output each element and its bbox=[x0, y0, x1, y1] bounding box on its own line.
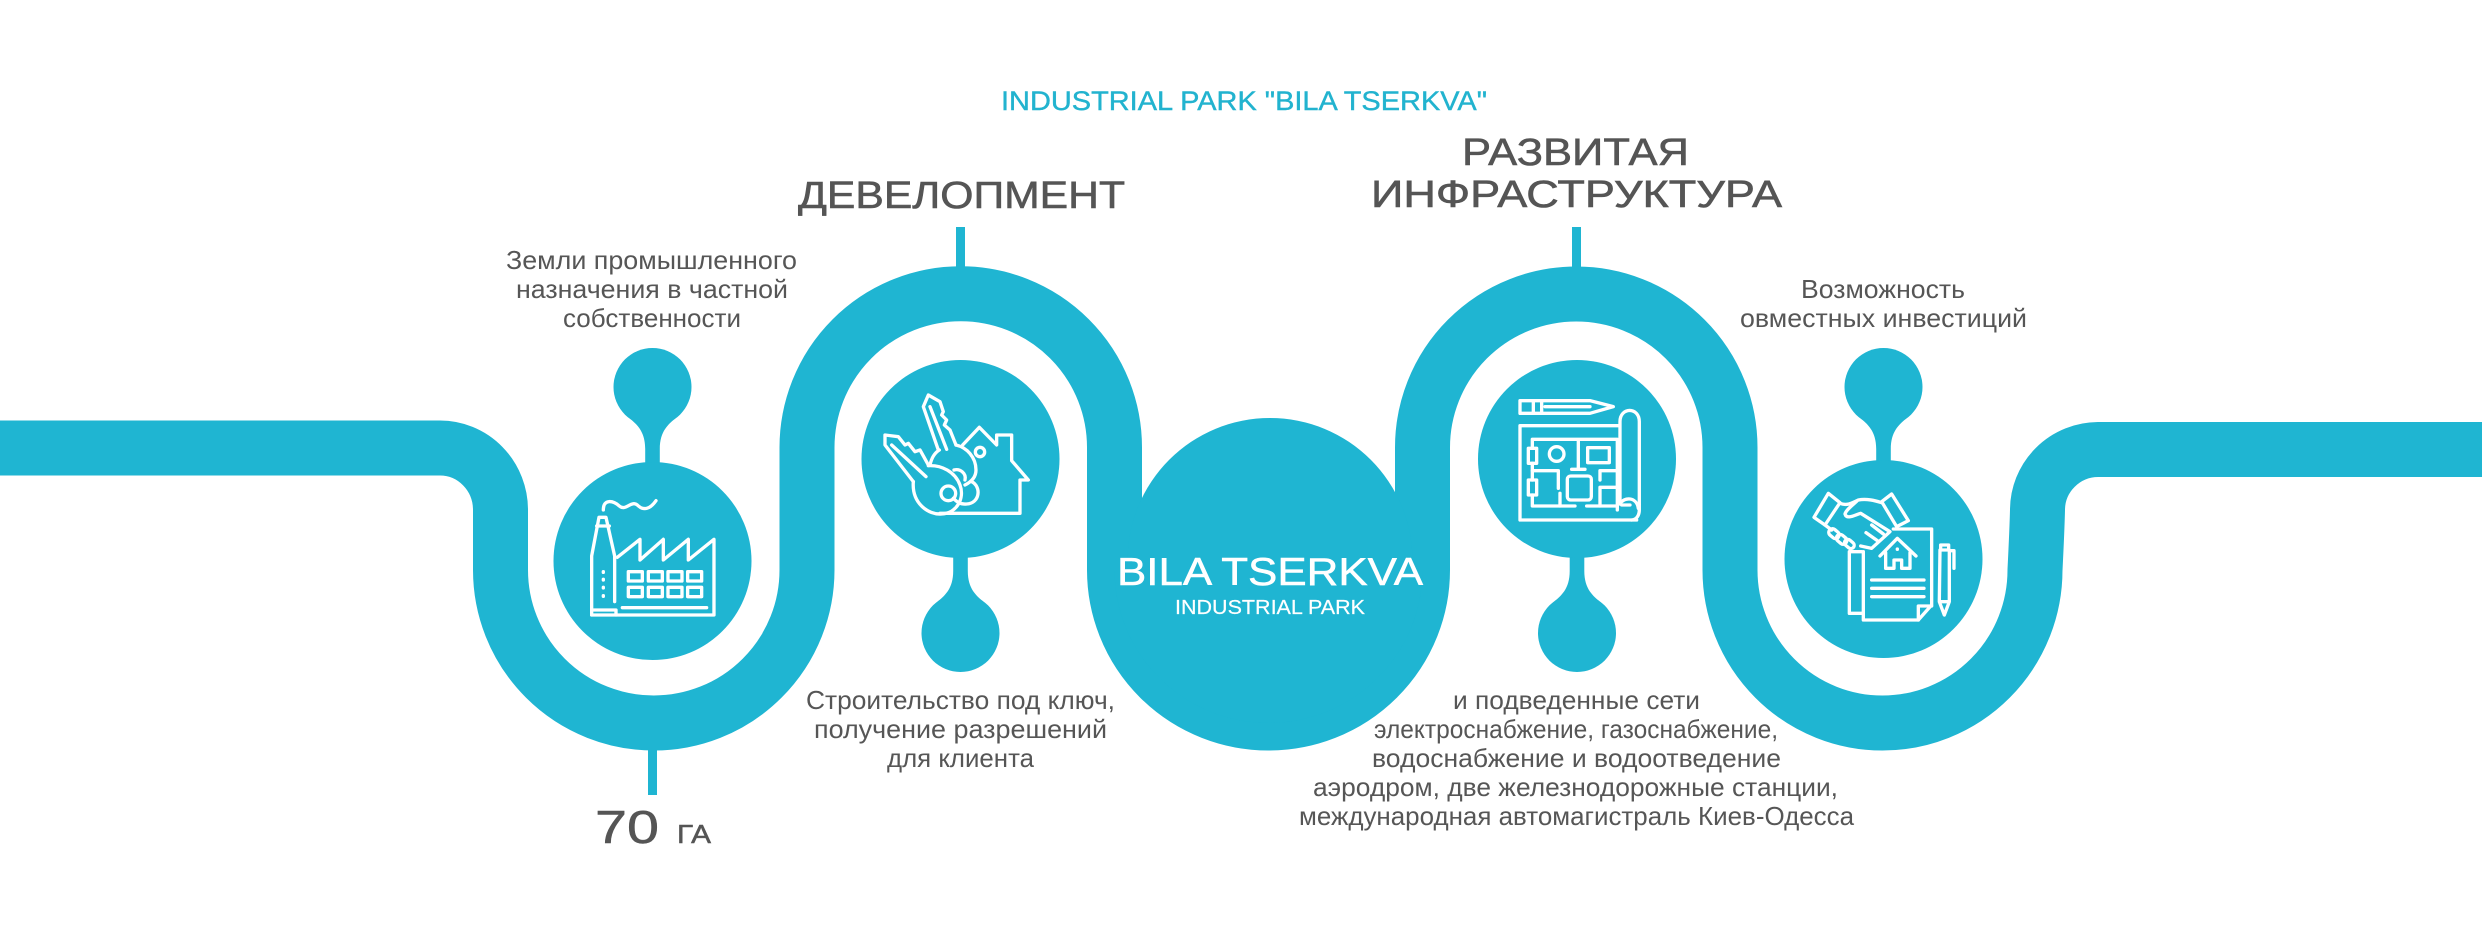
heading: developed infrastructure: ИНФРАСТРУКТУРА bbox=[1371, 174, 1783, 216]
text: joint investment bbox=[1740, 274, 2027, 333]
text: turnkey construction bbox=[806, 685, 1115, 773]
text: networks and transport: водоснабжение и водоотведение bbox=[1372, 743, 1781, 773]
text: networks and transport: электроснабжение, газоснабжение, bbox=[1374, 714, 1778, 744]
central hub circle bbox=[1114, 418, 1422, 723]
text: networks and transport: и подведенные сети bbox=[1453, 685, 1700, 715]
icon: handshake and contract bbox=[1814, 493, 1954, 620]
connector ticks bbox=[648, 227, 1581, 795]
text: land: назначения в частной bbox=[516, 274, 788, 304]
circle: land bbox=[554, 462, 752, 660]
icon: factory bbox=[592, 501, 714, 615]
text: turnkey construction: для клиента bbox=[887, 743, 1035, 773]
text: networks and transport: аэродром, две железнодорожные станции, bbox=[1313, 772, 1838, 802]
icon: keys and house bbox=[885, 395, 1028, 514]
title: INDUSTRIAL PARK "BILA TSERKVA" bbox=[1001, 86, 1487, 116]
text: networks and transport bbox=[1299, 685, 1855, 831]
node: development bbox=[922, 548, 1000, 672]
hub label bbox=[1117, 551, 1423, 619]
hub label: INDUSTRIAL PARK bbox=[1175, 597, 1366, 619]
winding ribbon bbox=[0, 294, 2482, 723]
text: turnkey construction: получение разрешений bbox=[814, 714, 1107, 744]
heading: developed infrastructure bbox=[1371, 132, 1783, 216]
heading: development: ДЕВЕЛОПМЕНТ bbox=[798, 175, 1125, 217]
text: turnkey construction: Строительство под ключ, bbox=[806, 685, 1115, 715]
circle: infrastructure bbox=[1478, 360, 1676, 558]
stat: 70 ha bbox=[595, 801, 712, 853]
text: joint investment: Возможность bbox=[1801, 274, 1965, 304]
text: land: Земли промышленного bbox=[506, 245, 797, 275]
text: networks and transport: международная автомагистраль Киев-Одесса bbox=[1299, 801, 1855, 831]
node: investment bbox=[1844, 348, 1922, 472]
node: land bbox=[614, 348, 692, 472]
text: land bbox=[506, 245, 797, 333]
circle: investment bbox=[1784, 460, 1982, 658]
stat: 70 ha: ГА bbox=[677, 819, 712, 849]
text: joint investment: овместных инвестиций bbox=[1740, 303, 2027, 333]
text: land: собственности bbox=[563, 303, 741, 333]
stat: 70 ha: 70 bbox=[595, 801, 659, 853]
heading: developed infrastructure: РАЗВИТАЯ bbox=[1462, 132, 1689, 174]
circle: development bbox=[862, 360, 1060, 558]
node: infrastructure bbox=[1538, 548, 1616, 672]
icon: blueprint and pencil bbox=[1520, 401, 1639, 520]
hub label: BILA TSERKVA bbox=[1117, 551, 1423, 594]
